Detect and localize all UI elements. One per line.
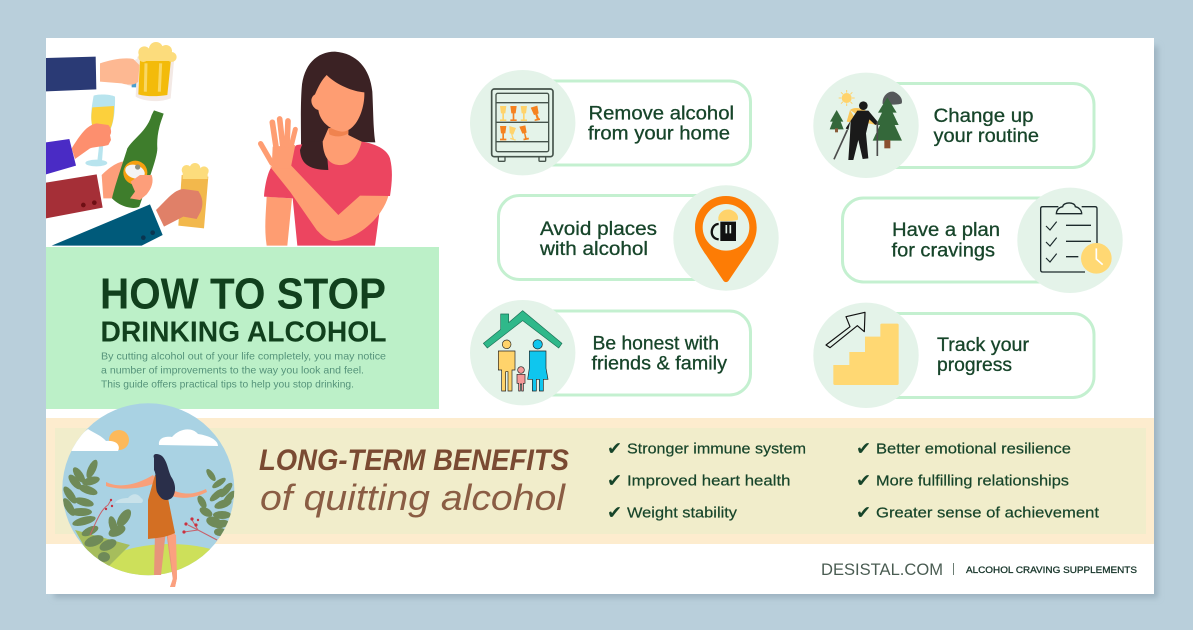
benefits heading	[259, 444, 569, 518]
leaves left	[61, 458, 237, 562]
green bottle	[112, 110, 164, 208]
tip: have a plan for cravings	[842, 188, 1123, 293]
label: progress	[937, 355, 1012, 376]
benefits list: column 2: ✔	[856, 502, 871, 524]
hand behind bottle	[102, 161, 127, 198]
benefits list: column 1: Improved heart health	[627, 472, 790, 490]
benefits list: column 2: ✔	[856, 438, 871, 460]
intro text	[101, 350, 386, 390]
fingers on bottle	[130, 175, 153, 200]
label	[892, 220, 1000, 262]
label	[592, 334, 728, 374]
intro text: By cutting alcohol out of your life completely, you may notice	[101, 350, 386, 362]
face	[311, 75, 364, 132]
label: Have a plan	[892, 220, 1000, 241]
label	[934, 106, 1039, 147]
tip: change up your routine	[813, 73, 1094, 178]
beer mug	[123, 42, 177, 101]
footer branding: ALCOHOL CRAVING SUPPLEMENTS	[966, 565, 1137, 576]
footer branding	[821, 560, 1137, 579]
label: Avoid places	[540, 219, 657, 240]
footer branding: DESISTAL.COM	[821, 560, 943, 579]
benefits heading: LONG-TERM BENEFITS	[259, 444, 569, 477]
subheading: DRINKING ALCOHOL	[100, 316, 386, 348]
label: friends & family	[592, 354, 728, 374]
benefits list: column 2: ✔	[856, 470, 871, 492]
raised hand	[261, 119, 295, 168]
benefits list: column 2: More fulfilling relationships	[876, 472, 1069, 490]
benefits list: column 1: ✔	[607, 470, 622, 492]
red berries	[90, 500, 217, 540]
icon: wine cabinet	[492, 89, 553, 161]
raised arm	[270, 165, 388, 241]
heading: HOW TO STOP	[100, 270, 386, 318]
hand on beer glass	[156, 189, 202, 227]
tip: track your progress	[813, 303, 1094, 408]
benefits list: column 1	[607, 438, 806, 524]
icon: location pin with beer mug	[695, 196, 757, 282]
benefits list: column 2: Better emotional resilience	[876, 440, 1071, 458]
champagne glass	[85, 95, 115, 166]
teal sleeve	[52, 204, 163, 246]
label: from your home	[588, 124, 730, 144]
label: for cravings	[892, 240, 995, 262]
benefits list: column 1: ✔	[607, 438, 622, 460]
purple sleeve	[46, 139, 76, 174]
intro text: a number of improvements to the way you look and feel.	[101, 364, 364, 376]
benefits list: column 2	[856, 438, 1100, 524]
benefits list: column 1: Weight stability	[627, 504, 738, 522]
illustration: hands offering alcohol	[46, 42, 209, 246]
benefits list: column 2: Greater sense of achievement	[876, 504, 1100, 522]
benefits heading: of quitting alcohol	[260, 477, 566, 518]
clouds	[72, 429, 119, 451]
left arm	[265, 197, 292, 246]
hill	[101, 544, 210, 576]
title panel	[46, 247, 439, 409]
label: Remove alcohol	[588, 104, 734, 124]
label	[937, 335, 1030, 376]
hand on glass	[72, 123, 111, 159]
icon: stairs with arrow	[826, 312, 899, 385]
label	[539, 219, 657, 260]
woman with open arms	[106, 454, 207, 587]
intro text: This guide offers practical tips to help you stop drinking.	[101, 378, 354, 390]
hand on mug	[100, 58, 139, 85]
hair	[301, 52, 375, 171]
icon: family under roof	[483, 311, 562, 391]
illustration: woman in nature	[62, 403, 234, 587]
benefits banner	[46, 418, 1154, 544]
benefits list: column 1: ✔	[607, 502, 622, 524]
navy sleeve	[46, 57, 96, 91]
beer glass	[178, 163, 209, 228]
label: Change up	[934, 106, 1034, 127]
tip: be honest with friends and family	[470, 300, 750, 405]
illustration: woman refusing	[261, 52, 392, 246]
neck and chest	[323, 125, 362, 165]
label: Be honest with	[592, 334, 719, 354]
label: your routine	[934, 126, 1039, 147]
maroon sleeve	[46, 174, 103, 218]
icon: checklist with clock	[1041, 203, 1112, 274]
tip: remove alcohol from your home	[470, 70, 750, 175]
label: with alcohol	[539, 239, 648, 260]
benefits list: column 1: Stronger immune system	[627, 440, 806, 458]
shirt	[264, 142, 392, 246]
sun	[109, 430, 129, 450]
icon: hiker in forest	[830, 90, 902, 160]
scene circle	[62, 403, 234, 576]
label	[588, 104, 734, 144]
tip: avoid places with alcohol	[498, 185, 779, 291]
label: Track your	[937, 335, 1030, 356]
